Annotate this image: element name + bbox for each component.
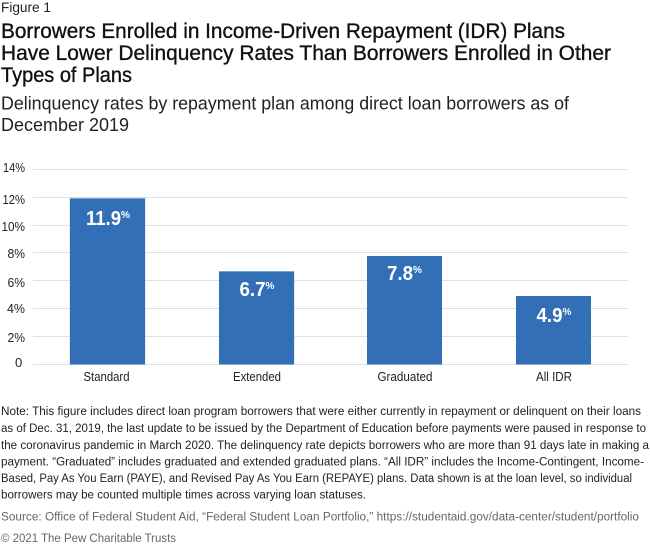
- title: Types of Plans: [1, 64, 132, 87]
- bar: Extended 6.7%: 6.7: [240, 279, 266, 301]
- subtitle: December 2019: [1, 115, 129, 135]
- subtitle: [1, 94, 570, 135]
- title: Borrowers Enrolled in Income-Driven Repayment (IDR) Plans: [1, 20, 565, 43]
- source: Source: Office of Federal Student Aid, “Federal Student Loan Portfolio,” https://studentaid.gov/data-center/student/portfolio: [1, 512, 639, 524]
- bar: Extended 6.7%: %: [266, 281, 274, 292]
- category labels: [84, 370, 572, 384]
- subtitle: Delinquency rates by repayment plan among direct loan borrowers as of: [1, 94, 570, 114]
- y axis labels: 6%: [8, 275, 25, 290]
- note: Based, Pay As You Earn (PAYE), and Revised Pay As You Earn (REPAYE) plans. Data shown is at the loan level, so individual: [1, 473, 632, 485]
- bar chart: [2, 160, 628, 384]
- bar: Graduated 7.8%: [367, 256, 442, 364]
- y axis labels: 2%: [8, 330, 25, 345]
- bar: All IDR 4.9%: %: [562, 307, 572, 318]
- copyright: © 2021 The Pew Charitable Trusts: [1, 533, 176, 545]
- bar: All IDR 4.9%: 4.9: [536, 305, 562, 327]
- bar: Standard 11.9%: 11.9: [86, 208, 121, 230]
- y axis labels: 12%: [2, 192, 25, 207]
- y axis labels: 14%: [3, 160, 25, 175]
- y axis labels: 8%: [8, 246, 25, 261]
- bar: Standard 11.9%: %: [121, 210, 130, 221]
- y axis labels: 10%: [2, 219, 25, 234]
- bar: Standard 11.9%: [70, 198, 146, 364]
- y axis labels: 4%: [7, 301, 25, 316]
- note: Note: This figure includes direct loan program borrowers that were either currently in repayment or delinquent on their loans: [1, 406, 641, 418]
- note: as of Dec. 31, 2019, the last update to be issued by the Department of Education before payments were paused in response to: [1, 423, 646, 435]
- category labels: Graduated: [378, 370, 433, 384]
- category labels: Extended: [233, 370, 281, 384]
- note: [1, 406, 650, 502]
- title: [1, 20, 611, 87]
- y axis labels: [2, 160, 25, 370]
- y axis labels: 0: [15, 355, 22, 370]
- title: Have Lower Delinquency Rates Than Borrowers Enrolled in Other: [1, 42, 611, 65]
- note: the coronavirus pandemic in March 2020. The delinquency rate depicts borrowers who are more than 91 days late in making a: [1, 440, 650, 452]
- bar: Graduated 7.8%: %: [413, 265, 422, 276]
- bar: All IDR 4.9%: [516, 296, 591, 364]
- note: borrowers may be counted multiple times across varying loan statuses.: [1, 490, 366, 502]
- category labels: All IDR: [536, 370, 572, 384]
- category labels: Standard: [84, 370, 130, 384]
- note: payment. “Graduated” includes graduated and extended graduated plans. “All IDR” includes the Income-Contingent, Income-: [1, 456, 644, 468]
- bar: Extended 6.7%: [219, 271, 294, 364]
- bar: Graduated 7.8%: 7.8: [387, 263, 413, 285]
